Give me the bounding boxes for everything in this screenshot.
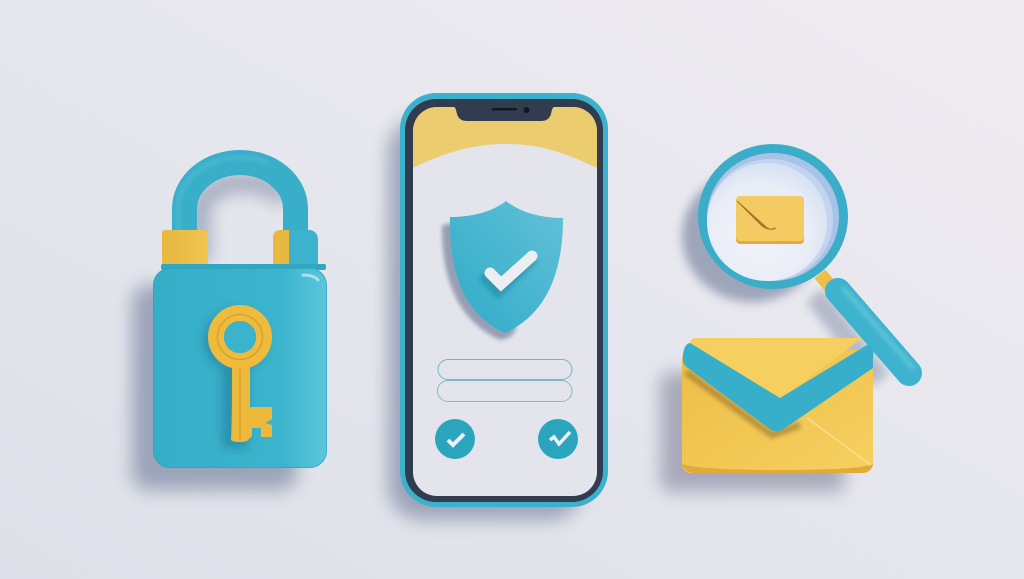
flap shadow	[686, 372, 800, 435]
key shadow	[204, 310, 266, 448]
handle	[838, 289, 913, 373]
screen	[413, 107, 597, 496]
envelope shadow	[660, 372, 845, 492]
speaker	[492, 108, 517, 110]
magnifier shadow	[682, 170, 822, 302]
key	[216, 313, 272, 442]
shield	[450, 201, 563, 333]
shackle	[178, 157, 296, 236]
envelope body	[682, 350, 873, 473]
check mark	[490, 256, 532, 284]
yellow header	[413, 107, 597, 168]
shield shadow	[442, 222, 516, 340]
handle shadow	[815, 295, 880, 380]
neck	[820, 274, 838, 296]
right collar	[273, 230, 318, 265]
check mark shadow	[486, 261, 530, 291]
badge right	[538, 419, 578, 459]
icon: padlock with key	[132, 157, 327, 490]
lens	[707, 153, 839, 281]
notch	[452, 99, 556, 121]
teal flap band	[683, 343, 873, 432]
icon: large envelope	[660, 338, 873, 492]
phone bezel	[405, 99, 603, 502]
small envelope	[736, 196, 804, 244]
input field 2	[438, 380, 572, 402]
left collar	[162, 230, 208, 265]
icon: magnifying glass	[682, 144, 913, 380]
padlock shadow	[132, 182, 297, 490]
icon: smartphone	[388, 93, 608, 520]
top flap	[690, 338, 862, 400]
input field 1	[438, 360, 572, 380]
phone case	[400, 93, 608, 507]
lock body	[153, 264, 327, 468]
camera	[524, 107, 530, 113]
badge left	[435, 419, 475, 459]
phone shadow	[388, 118, 583, 520]
rim	[698, 144, 848, 289]
